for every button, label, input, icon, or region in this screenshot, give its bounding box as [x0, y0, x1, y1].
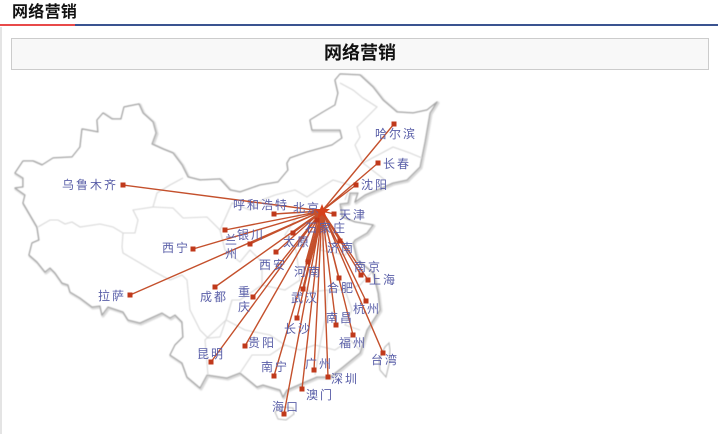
city labels: 合肥	[327, 280, 355, 295]
city labels: 重	[238, 285, 252, 299]
city labels: 北京	[293, 201, 321, 215]
city labels: 长沙	[284, 322, 312, 336]
city labels: 昆明	[197, 347, 225, 361]
title bar: 网络营销	[324, 43, 396, 63]
city labels: 银川	[237, 228, 265, 242]
city labels: 台湾	[371, 352, 399, 367]
city labels: 庆	[238, 300, 252, 314]
city markers	[120, 122, 396, 416]
city labels: 太原	[283, 234, 311, 249]
city labels	[62, 126, 417, 414]
city labels: 济南	[327, 240, 355, 255]
heading: 网络营销	[12, 4, 77, 21]
city labels: 成都	[200, 290, 228, 304]
city labels: 杭州	[353, 301, 381, 316]
city labels: 天津	[339, 208, 367, 222]
map outline	[15, 74, 438, 420]
heading rule	[0, 24, 718, 26]
city labels: 福州	[339, 335, 367, 350]
city labels: 武汉	[291, 291, 319, 305]
title bar	[11, 38, 709, 70]
city labels: 西宁	[162, 240, 190, 255]
city labels: 广州	[305, 357, 333, 371]
icon: star marking Beijing hub	[314, 204, 330, 219]
city labels: 南昌	[326, 310, 354, 325]
city labels: 石家庄	[305, 220, 347, 235]
city labels: 澳门	[306, 387, 334, 402]
city labels: 兰	[225, 233, 239, 247]
province borders	[38, 83, 422, 375]
city labels: 海口	[272, 399, 300, 414]
city labels: 沈阳	[361, 177, 389, 192]
city labels: 上海	[369, 272, 397, 287]
city labels: 贵阳	[248, 336, 276, 350]
city labels: 西安	[259, 257, 287, 272]
city labels: 南宁	[261, 359, 289, 374]
city labels: 长春	[383, 157, 411, 171]
city labels: 呼和浩特	[233, 197, 289, 212]
city labels: 河南	[294, 264, 322, 279]
city labels: 哈尔滨	[375, 126, 417, 141]
city labels: 南京	[354, 259, 382, 274]
city labels: 州	[225, 247, 239, 261]
city labels: 深圳	[331, 372, 359, 386]
city labels: 拉萨	[98, 288, 126, 303]
city labels: 乌鲁木齐	[62, 177, 118, 192]
network route lines	[123, 124, 394, 414]
